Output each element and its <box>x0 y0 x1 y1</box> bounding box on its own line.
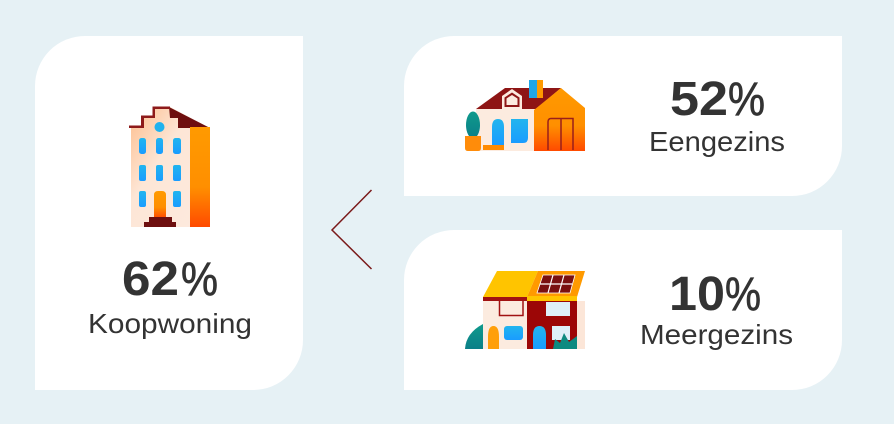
figure: 62%: % <box>181 252 218 305</box>
label: Meergezins: Meergezins <box>640 319 793 350</box>
panel: meergezins <box>404 230 842 390</box>
figure: 10%: 10 <box>669 268 725 321</box>
icon: tall gabled townhouse <box>129 106 210 227</box>
label: Eengezins: Eengezins <box>649 126 785 157</box>
panel: koopwoning <box>35 36 303 390</box>
icon: detached house <box>465 80 585 151</box>
icon: terraced house with solar panels <box>465 271 585 349</box>
figure: 52%: % <box>728 72 765 125</box>
arrow <box>332 190 372 269</box>
panel: eengezins <box>404 36 842 196</box>
figure: 62%: 62 <box>122 253 179 306</box>
figure: 52%: 52 <box>670 73 728 126</box>
figure: 10%: % <box>725 267 761 320</box>
figure: 62% <box>122 252 218 306</box>
figure: 52% <box>670 72 765 126</box>
figure: 10% <box>669 267 761 321</box>
label: Koopwoning: Koopwoning <box>88 308 252 339</box>
